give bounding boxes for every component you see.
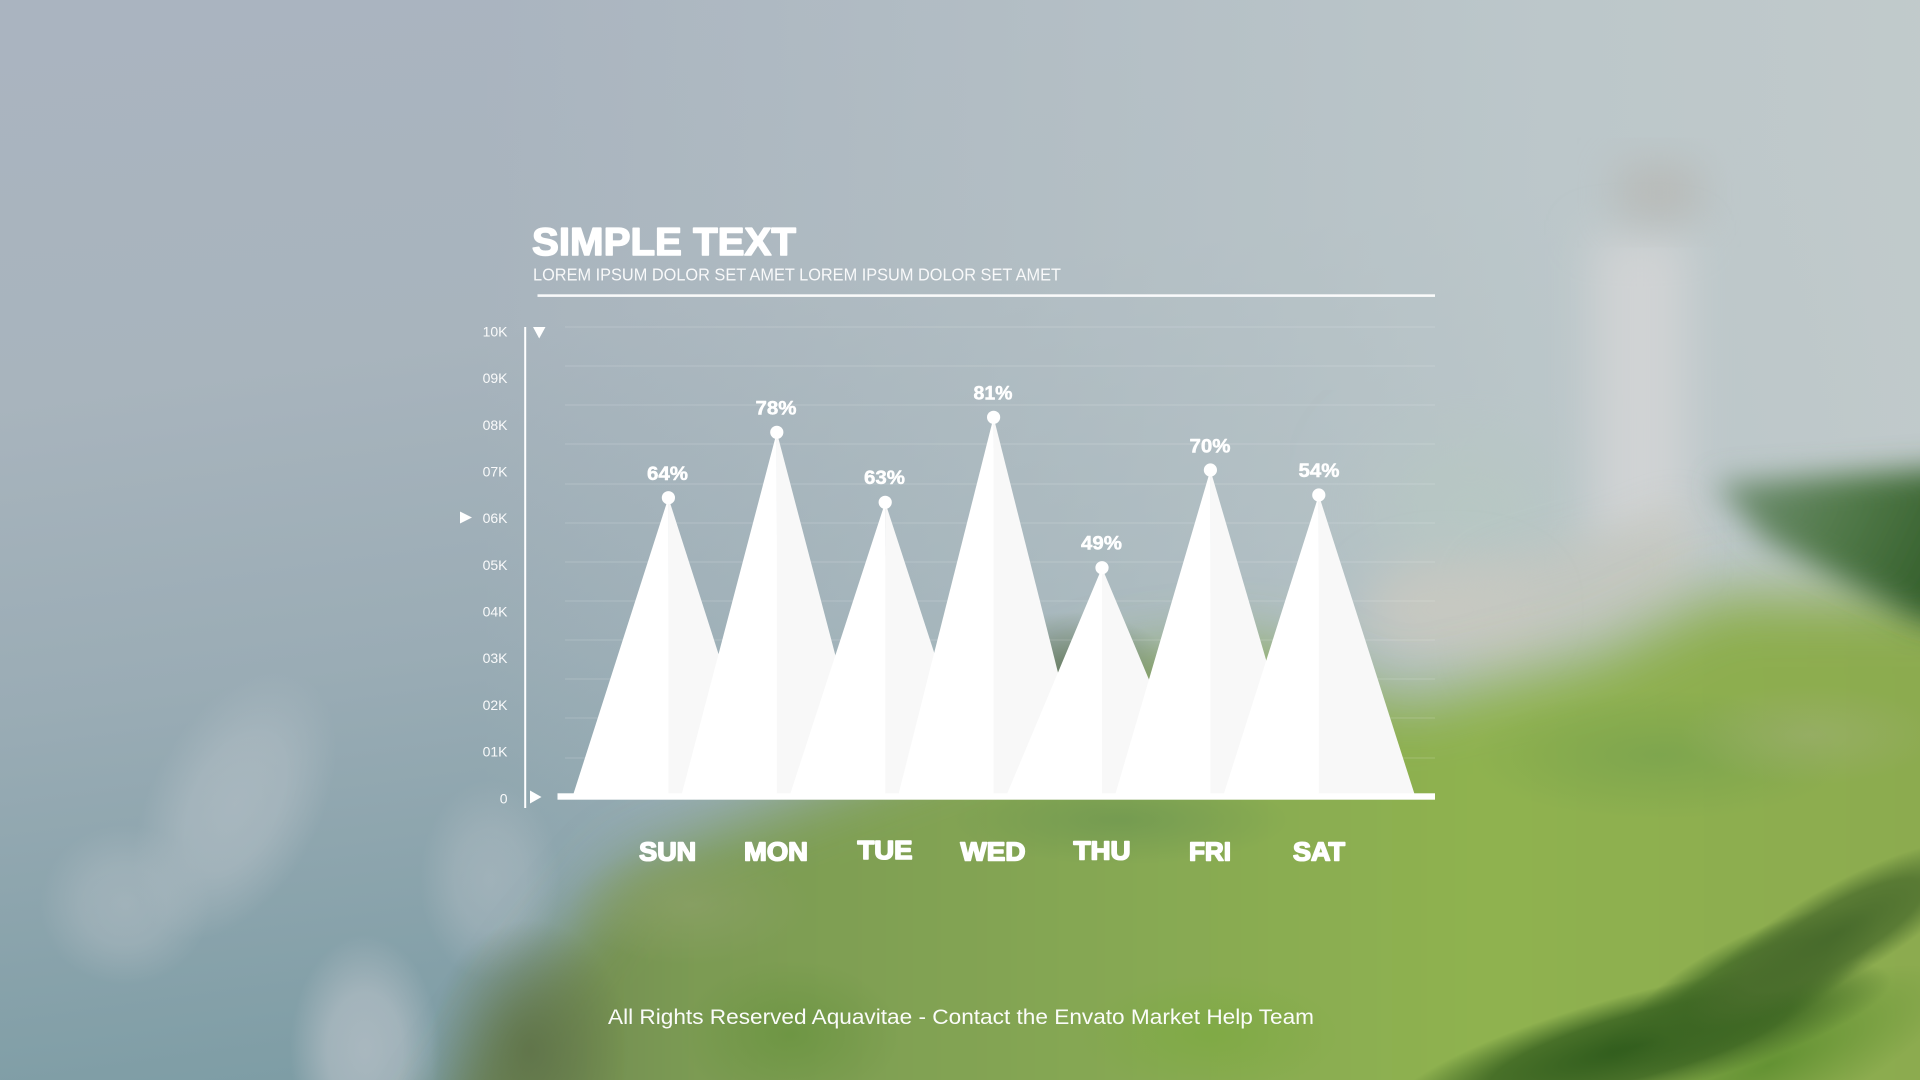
peak: Thursday 49%: 49%: [1081, 534, 1122, 554]
peak: Tuesday 63%: [790, 468, 980, 794]
day labels: THU: [1074, 835, 1130, 865]
day labels: WED: [960, 836, 1026, 866]
day labels: SAT: [1293, 836, 1345, 866]
peak: Friday 70%: 70%: [1190, 436, 1231, 458]
y axis labels: 08K: [483, 417, 508, 433]
y axis labels: 03K: [483, 650, 508, 666]
y axis labels: 09K: [483, 370, 508, 386]
day labels: FRI: [1189, 836, 1231, 866]
x axis baseline: [558, 793, 1435, 800]
footer text: All Rights Reserved Aquavitae - Contact the Envato Market Help Team: [608, 1005, 1314, 1029]
peak: Sunday 64%: 64%: [647, 464, 688, 485]
icon: down arrow: [533, 327, 546, 338]
y axis labels: 0: [500, 790, 508, 806]
day labels: TUE: [858, 835, 912, 865]
day labels: [639, 835, 1345, 867]
y axis labels: 01K: [483, 744, 508, 760]
y axis labels: 05K: [483, 557, 508, 573]
icon: right arrow: [530, 790, 542, 804]
subtitle: LOREM IPSUM DOLOR SET AMET LOREM IPSUM DOLOR SET AMET: [533, 264, 1061, 284]
day labels: SUN: [639, 837, 696, 867]
y axis labels: 10K: [483, 324, 508, 340]
peak: Thursday 49%: [1007, 534, 1197, 794]
peak: Saturday 54%: 54%: [1298, 461, 1340, 482]
title underline: [538, 294, 1435, 297]
icon: level arrow: [460, 512, 472, 524]
peak: Tuesday 63%: 63%: [864, 468, 905, 489]
y axis labels: 02K: [483, 697, 508, 713]
title: SIMPLE TEXT: [532, 221, 796, 264]
y axis labels: [483, 324, 508, 806]
peak: Sunday 64%: [573, 464, 763, 794]
chart: [460, 324, 1435, 867]
peak: Saturday 54%: [1224, 461, 1414, 794]
peak: Monday 78%: [682, 398, 872, 794]
peak: Wednesday 81%: [899, 384, 1089, 794]
day labels: MON: [744, 837, 808, 867]
peak: Wednesday 81%: 81%: [974, 384, 1013, 404]
peak: Monday 78%: 78%: [756, 398, 797, 420]
y axis line: [524, 327, 526, 808]
y axis labels: 04K: [483, 604, 508, 620]
y axis labels: 07K: [483, 464, 508, 480]
peak: Friday 70%: [1115, 436, 1305, 794]
y axis labels: 06K: [483, 510, 508, 526]
